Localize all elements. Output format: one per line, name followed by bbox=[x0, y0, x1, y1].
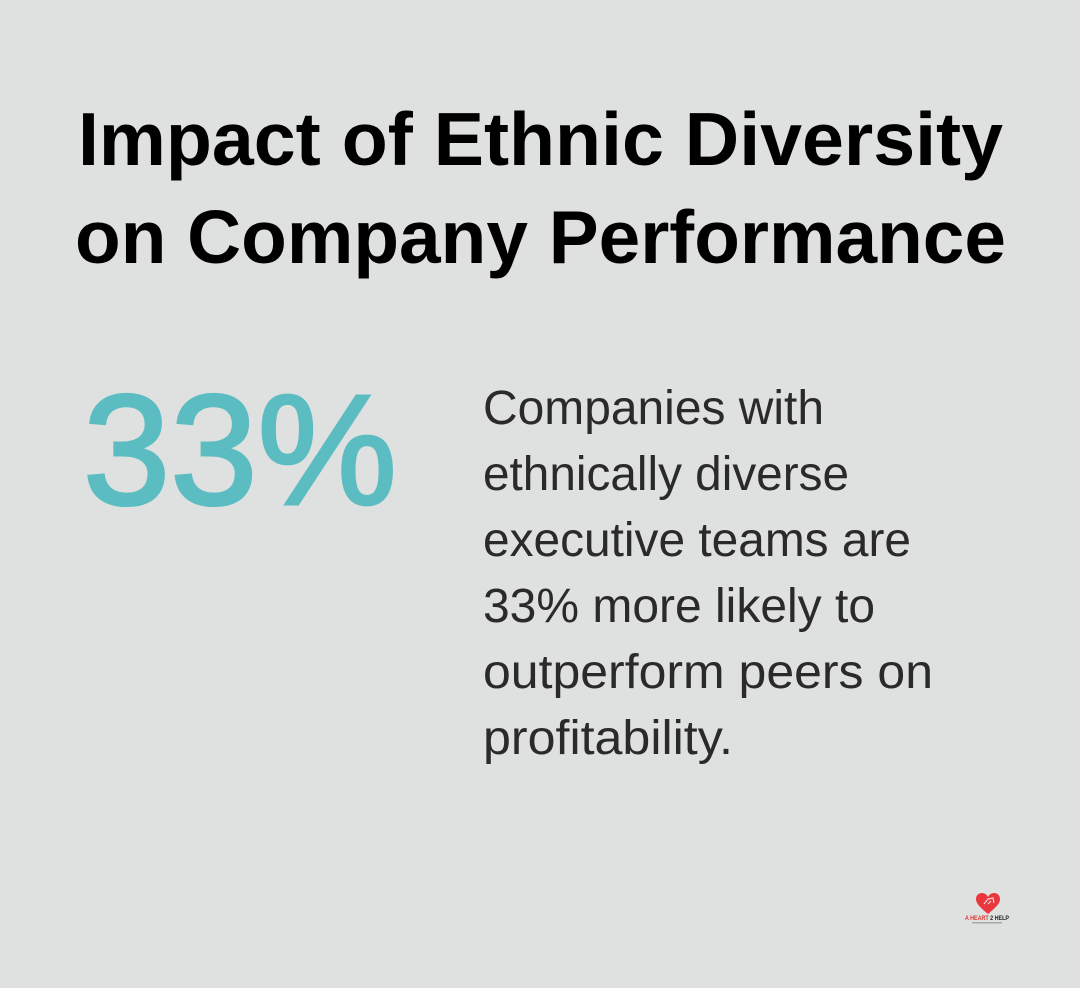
big statistic: 33%: 33% bbox=[83, 363, 397, 538]
logo tagline bbox=[972, 922, 1002, 924]
icon: hands bbox=[984, 898, 994, 904]
description text: executive teams are bbox=[483, 514, 911, 567]
title: on Company Performance bbox=[75, 195, 1006, 279]
description text: Companies with bbox=[483, 382, 824, 435]
title bbox=[75, 97, 1006, 279]
title: Impact of Ethnic Diversity bbox=[78, 97, 1003, 181]
logo: A Heart 2 Help bbox=[965, 893, 1010, 924]
description text bbox=[483, 382, 933, 765]
logo wordmark: A HEART 2 HELP bbox=[965, 915, 1010, 922]
description text: outperform peers on bbox=[483, 646, 933, 699]
description text: profitability. bbox=[483, 712, 733, 765]
icon: heart bbox=[976, 893, 1000, 914]
description text: 33% more likely to bbox=[483, 580, 875, 633]
description text: ethnically diverse bbox=[483, 448, 849, 501]
